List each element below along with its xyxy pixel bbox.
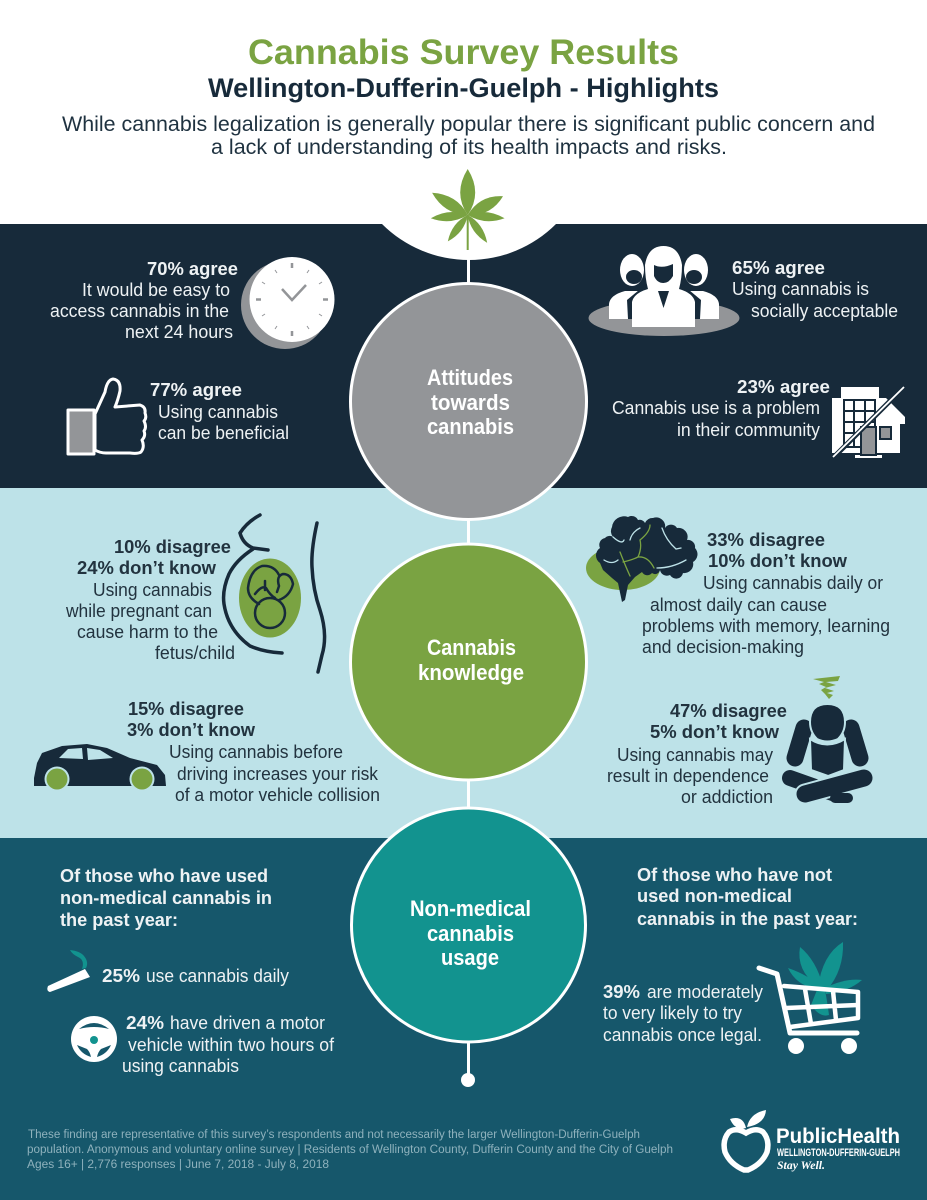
stat: 39% likely: 39% <box>603 981 640 1002</box>
circle: non-medical cannabis usage <box>352 808 586 1042</box>
icon: steering wheel <box>71 1016 117 1062</box>
stat: memory: almost daily can cause <box>650 595 827 615</box>
stat: 65% agree: socially acceptable <box>751 301 898 321</box>
stat: 24% driven <box>122 1012 335 1076</box>
stat: 23% agree: in their community <box>677 420 820 440</box>
stat: 39% likely: cannabis once legal. <box>603 1025 762 1045</box>
title: Cannabis Survey Results <box>248 33 679 72</box>
icon: car <box>34 744 166 792</box>
stat: driving: driving increases your risk <box>177 764 379 784</box>
footnote: Ages 16+ | 2,776 responses | June 7, 2018 - July 8, 2018 <box>27 1159 329 1171</box>
stat: pregnancy <box>65 536 235 663</box>
heading: have used: non-medical cannabis in <box>60 887 272 908</box>
intro text: a lack of understanding of its health impacts and risks. <box>211 136 727 159</box>
stat: 77% agree: 77% agree <box>150 379 242 400</box>
stat: 23% agree: Cannabis use is a problem <box>612 398 820 418</box>
stat: driving: 3% don’t know <box>127 719 256 740</box>
stat: driving: of a motor vehicle collision <box>175 785 380 805</box>
footnote: population. Anonymous and voluntary online survey | Residents of Wellington County, Dufferin County and the City of Guelph <box>27 1144 673 1156</box>
footnote: These finding are representative of this survey’s respondents and not necessarily the larger Wellington-Dufferin-Guelph <box>28 1129 640 1141</box>
icon: apple <box>724 1110 768 1170</box>
stat: dependence: 47% disagree <box>670 700 787 721</box>
stat: 24% driven: using cannabis <box>122 1056 239 1076</box>
circle: non-medical cannabis usage: cannabis <box>427 921 514 946</box>
icon: clock <box>241 257 334 349</box>
stat: memory: 33% disagree <box>707 529 825 550</box>
stat: 65% agree <box>732 257 898 321</box>
icon: community building and house <box>832 387 905 458</box>
stat: pregnancy: 10% disagree <box>114 536 231 557</box>
circle: non-medical cannabis usage: Non-medical <box>410 896 531 921</box>
icon: shopping cart with leaf <box>759 942 862 1054</box>
top white semicircle <box>382 224 556 260</box>
circle: attitudes towards cannabis: Attitudes <box>427 365 513 390</box>
stat: 70% agree: 70% agree <box>147 258 238 279</box>
heading: have used: Of those who have used <box>60 865 268 886</box>
footnote <box>27 1129 673 1171</box>
stat: 77% agree: can be beneficial <box>158 423 289 443</box>
stat: pregnancy: 24% don’t know <box>77 557 217 578</box>
heading: have not used <box>637 864 858 929</box>
circle: cannabis knowledge <box>350 544 586 780</box>
stat: 77% agree: Using cannabis <box>158 402 278 422</box>
intro text: While cannabis legalization is generally popular there is significant public concern and <box>62 113 875 136</box>
heading: have used: the past year: <box>60 909 178 930</box>
icon: joint <box>47 950 90 992</box>
icon: thumbs up <box>68 379 146 454</box>
stat: 70% agree: It would be easy to <box>82 280 230 300</box>
logo: Public Health: PublicHealth <box>776 1125 900 1148</box>
intro text <box>62 113 875 159</box>
stat: 25% daily: 25% <box>102 965 140 986</box>
circle: attitudes towards cannabis: towards <box>431 390 510 415</box>
icon: stressed seated person <box>790 676 864 798</box>
stat: 24% driven: vehicle within two hours of <box>128 1035 335 1055</box>
panel: knowledge background <box>0 488 927 838</box>
stat: memory: problems with memory, learning <box>642 616 890 636</box>
stat: dependence: result in dependence <box>607 766 769 786</box>
stat: dependence: or addiction <box>681 787 773 807</box>
icon: group of people <box>588 246 740 336</box>
icon: brain <box>586 516 697 602</box>
logo: Public Health: Stay Well. <box>777 1158 825 1172</box>
heading: have used <box>60 865 272 930</box>
stat: 65% agree: Using cannabis is <box>732 279 869 299</box>
stat: pregnancy: while pregnant can <box>65 601 212 621</box>
stat: 24% driven: have driven a motor <box>170 1013 325 1033</box>
stat: 23% agree <box>612 376 830 440</box>
heading: have not used: cannabis in the past year: <box>637 908 858 929</box>
heading: have not used: used non-medical <box>637 885 792 906</box>
stat: memory <box>642 529 890 657</box>
stat: memory: 10% don’t know <box>708 550 848 571</box>
circle: attitudes towards cannabis: cannabis <box>427 414 514 439</box>
circle: cannabis knowledge: knowledge <box>418 660 524 685</box>
stat: driving: Using cannabis before <box>169 742 343 762</box>
circle: cannabis knowledge: Cannabis <box>427 635 516 660</box>
circle: attitudes towards cannabis <box>350 284 586 520</box>
stat: 70% agree <box>50 258 238 342</box>
stat: 24% driven: 24% <box>126 1012 164 1033</box>
stat: 70% agree: access cannabis in the <box>50 301 229 321</box>
stat: 39% likely: are moderately <box>647 982 763 1002</box>
stat: 65% agree: 65% agree <box>732 257 825 278</box>
stat: 39% likely: to very likely to try <box>603 1003 742 1023</box>
stat: dependence: 5% don’t know <box>650 721 780 742</box>
header <box>62 33 875 159</box>
timeline connector <box>461 258 475 1087</box>
logo: Public Health <box>724 1110 900 1172</box>
stat: driving: 15% disagree <box>128 698 244 719</box>
stat: 23% agree: 23% agree <box>737 376 830 397</box>
stat: 25% daily: use cannabis daily <box>146 966 289 986</box>
stat: 70% agree: next 24 hours <box>125 322 233 342</box>
stat: 39% likely <box>603 981 763 1045</box>
subtitle: Wellington-Dufferin-Guelph - Highlights <box>208 73 719 103</box>
stat: memory: and decision-making <box>642 637 804 657</box>
panel: usage background <box>0 838 927 1200</box>
stat: memory: Using cannabis daily or <box>703 573 883 593</box>
stat: pregnancy: cause harm to the <box>77 622 218 642</box>
heading: have not used: Of those who have not <box>637 864 832 885</box>
stat: driving <box>127 698 380 805</box>
stat: 77% agree <box>150 379 289 443</box>
stat: pregnancy: Using cannabis <box>93 580 212 600</box>
icon: pregnant body and fetus <box>224 515 325 672</box>
circle: non-medical cannabis usage: usage <box>441 945 499 970</box>
stat: dependence <box>607 700 787 807</box>
stat: dependence: Using cannabis may <box>617 745 773 765</box>
icon: cannabis leaf <box>429 169 506 250</box>
stat: pregnancy: fetus/child <box>155 643 235 663</box>
panel: attitudes background <box>0 224 927 488</box>
